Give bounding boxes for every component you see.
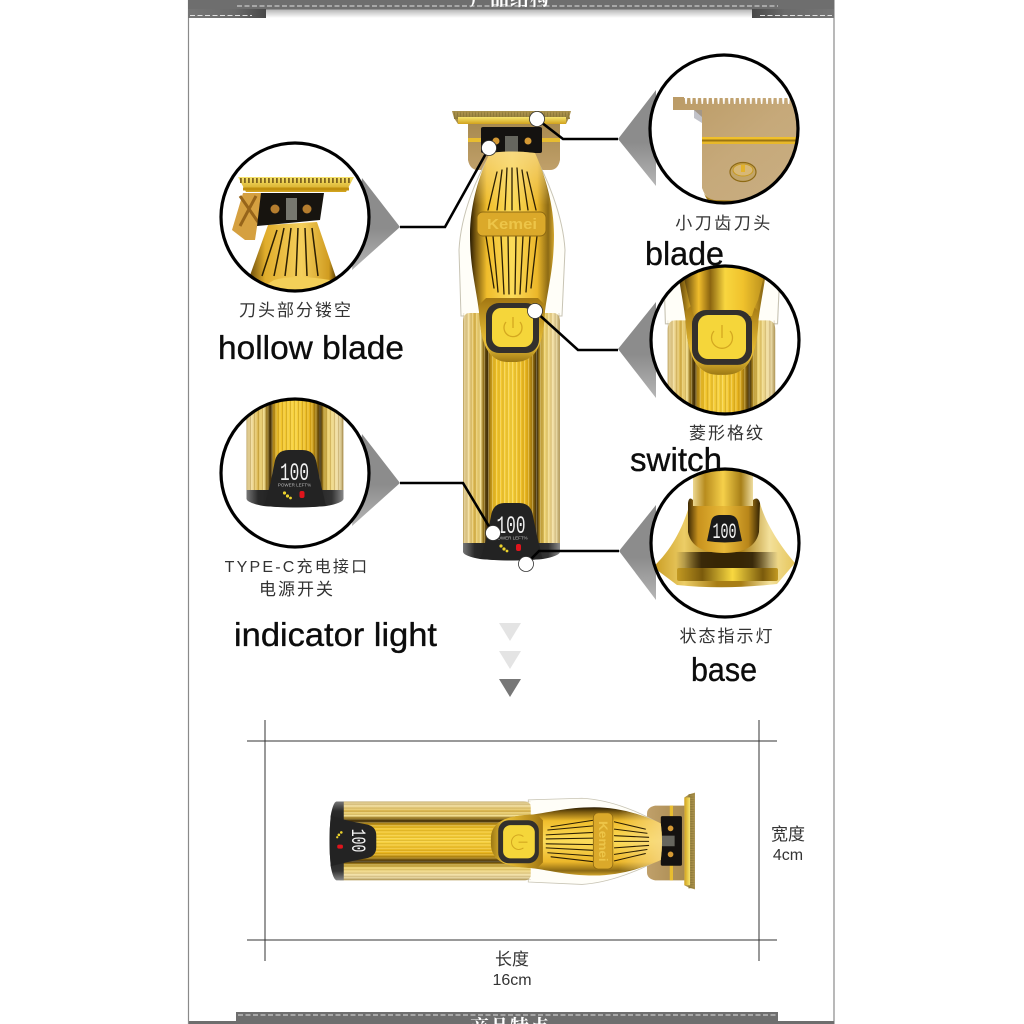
label: hollow blade en: hollow blade <box>218 329 404 366</box>
callout: base <box>619 460 799 617</box>
callout: base: 100 <box>712 520 736 545</box>
label: type-c cn: TYPE-C充电接口 <box>225 558 369 576</box>
callout: indicator light: 100 <box>280 459 309 488</box>
bottom ribbon heading <box>189 1012 834 1024</box>
label: switch cn: 菱形格纹 <box>689 424 765 443</box>
callout: indicator light <box>219 397 400 549</box>
dimension lines <box>247 720 777 961</box>
arrows pointing down <box>499 623 521 697</box>
label: blade en: blade <box>645 235 724 272</box>
callout: blade <box>618 55 804 204</box>
length dimension label: 长度 <box>495 950 529 969</box>
label: power switch cn: 电源开关 <box>259 580 335 599</box>
leader lines <box>400 119 619 564</box>
label: base en: base <box>691 651 757 688</box>
callout: switch <box>618 264 801 416</box>
label: blade cn: 小刀齿刀头 <box>675 214 773 233</box>
panel frame <box>188 0 834 1024</box>
callout: hollow blade <box>221 143 400 295</box>
callout: indicator light: POWER LEFT% <box>278 482 311 488</box>
label: base cn: 状态指示灯 <box>680 627 774 646</box>
length dimension label: 16cm <box>492 972 532 989</box>
label: hollow blade cn: 刀头部分镂空 <box>239 301 353 320</box>
label: indicator light en: indicator light <box>234 616 437 653</box>
horizontal trimmer <box>330 793 695 889</box>
length dimension label <box>492 950 532 989</box>
label: switch en: switch <box>630 441 722 478</box>
horizontal trimmer: Kemei <box>596 821 610 862</box>
main trimmer, vertical view: POWER LEFT% <box>494 536 528 540</box>
width dimension label: 宽度 <box>771 825 805 844</box>
callout dots <box>482 112 544 572</box>
horizontal trimmer: 100 <box>345 829 368 852</box>
infographic canvas <box>188 0 835 1024</box>
top ribbon heading <box>188 0 834 18</box>
main trimmer, vertical view <box>452 111 571 560</box>
width dimension label <box>771 825 805 864</box>
main trimmer, vertical view: 100 <box>496 512 526 541</box>
width dimension label: 4cm <box>773 847 803 864</box>
main trimmer, vertical view: Kemei <box>487 216 537 233</box>
